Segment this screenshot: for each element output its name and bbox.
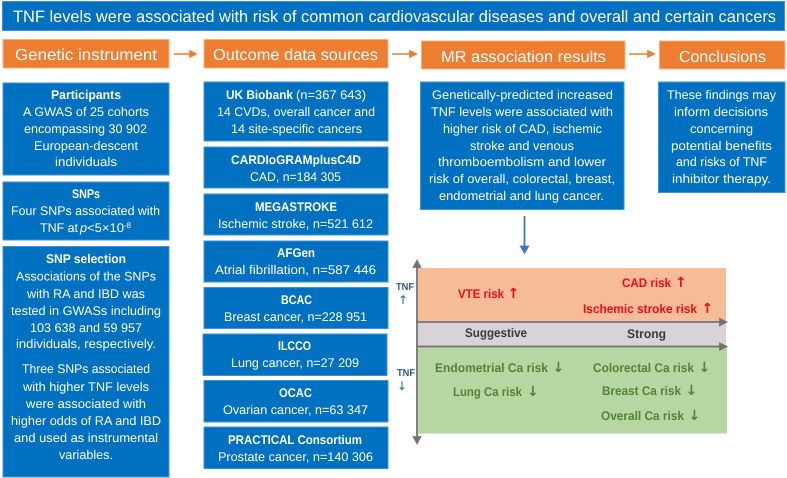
result: breast cancer risk: ↓ <box>686 383 697 399</box>
axis label: suggestive: Suggestive <box>465 326 527 340</box>
band: evidence strength axis <box>418 321 726 346</box>
label: TNF increased <box>396 282 414 307</box>
panel: OCAC: OCAC <box>279 386 312 400</box>
panel: conclusions text: inform decisions <box>674 105 768 119</box>
panel: CARDIoGRAMplusC4D: CAD, n=184 305 <box>250 170 341 184</box>
panel: CARDIoGRAMplusC4D <box>204 147 388 188</box>
label: TNF decreased: ↓ <box>397 379 407 393</box>
text: SNPs description: -8 <box>124 221 132 230</box>
text: SNPs description: TNF at <box>40 221 78 235</box>
panel: conclusions text: and risks of TNF <box>676 155 767 169</box>
text: participants description: encompassing 30 902 <box>24 122 147 136</box>
step header: MR association results: MR association results <box>441 49 606 66</box>
text: SNPs description: <5×10 <box>87 221 124 235</box>
chart: risk by TNF direction and evidence strength <box>396 261 727 443</box>
text: SNP association testing: with RA and IBD was <box>26 287 145 301</box>
text: SNPs description: Four SNPs associated with <box>11 204 160 218</box>
panel: OCAC <box>204 380 388 422</box>
result: colorectal cancer risk: ↓ <box>698 360 710 376</box>
text: UK Biobank outcomes <box>217 105 375 136</box>
label: TNF decreased: TNF <box>397 368 415 379</box>
result: lung cancer risk: Lung Ca risk <box>453 385 523 399</box>
text: instrumental variables: with higher TNF levels <box>22 380 149 394</box>
text: instrumental variables: variables. <box>59 448 113 462</box>
panel: MR association results text: thromboembolism and lower <box>438 155 606 169</box>
heading: SNP selection: SNP selection <box>46 252 126 266</box>
panel: MR association results text: risk of overall, colorectal, breast, <box>429 172 615 186</box>
label: TNF increased: TNF <box>396 282 414 293</box>
step header: conclusions: Conclusions <box>679 49 766 66</box>
heading: participants: Participants <box>51 88 121 102</box>
panel: MR association results text: Genetically-predicted increased <box>432 88 613 102</box>
axis: TNF direction <box>414 261 420 443</box>
panel: conclusions text <box>658 82 785 192</box>
text: UK Biobank outcomes: 14 CVDs, overall cancer and <box>217 105 375 119</box>
label: TNF increased: ↑ <box>398 293 408 307</box>
panel: PRACTICAL Consortium: PRACTICAL Consortium <box>228 433 362 447</box>
result: CAD risk: ↑ <box>675 275 687 291</box>
step header: outcome data sources: Outcome data sources <box>213 47 378 64</box>
heading: UK Biobank: (n=367 643) <box>296 88 366 102</box>
result: VTE risk: ↑ <box>508 286 519 302</box>
panel: BCAC: BCAC <box>281 293 312 307</box>
panel: SNP selection <box>3 246 169 477</box>
text: instrumental variables: Three SNPs associated <box>22 362 150 376</box>
panel: AFGen: Atrial fibrillation, n=587 446 <box>215 263 376 277</box>
step header: genetic instrument <box>3 40 169 68</box>
result: overall cancer risk: Overall Ca risk <box>601 409 685 423</box>
text: SNPs description: p <box>79 221 87 235</box>
band: higher TNF <box>418 268 726 321</box>
text: SNP association testing <box>11 270 161 351</box>
result: endometrial cancer risk: ↓ <box>552 360 564 376</box>
panel: ILCCO <box>203 334 387 376</box>
text: instrumental variables: and used as instrumental <box>14 431 158 445</box>
title <box>2 2 784 30</box>
text: SNP association testing: tested in GWASs including <box>11 304 161 318</box>
text: SNP association testing: individuals, respectively. <box>16 337 156 351</box>
text: UK Biobank outcomes: 14 site-specific cancers <box>231 122 362 136</box>
title: TNF levels were associated with risk of common cardiovascular diseases and overall and certain cancers <box>13 8 776 26</box>
result: ischemic stroke risk: Ischemic stroke risk <box>583 302 698 316</box>
result: lung cancer risk: ↓ <box>527 384 539 400</box>
panel: conclusions text: inhibitor therapy. <box>672 172 771 186</box>
panel: MR association results text: stroke and venous <box>470 139 574 153</box>
text: instrumental variables: were associated with <box>25 397 146 411</box>
panel: conclusions text: concerning <box>690 122 753 136</box>
panel: MR association results text <box>420 82 624 210</box>
panel: conclusions text: These findings may <box>667 88 777 102</box>
arrow: outcome data to MR results <box>392 51 416 57</box>
text: participants description: European-descent <box>34 139 139 153</box>
step header: outcome data sources <box>204 40 388 68</box>
panel: SNPs <box>3 182 169 240</box>
text: participants description: individuals <box>55 155 117 169</box>
axis label: strong: Strong <box>627 327 666 341</box>
step header: genetic instrument: Genetic instrument <box>15 47 158 64</box>
heading: SNPs: SNPs <box>72 187 100 201</box>
text: instrumental variables <box>11 362 161 462</box>
panel: BCAC: Breast cancer, n=228 951 <box>224 310 367 324</box>
result: breast cancer risk: Breast Ca risk <box>602 384 682 398</box>
panel: PRACTICAL Consortium: Prostate cancer, n=140 306 <box>218 450 373 464</box>
result: endometrial cancer risk: Endometrial Ca risk <box>435 361 549 375</box>
panel: MR association results text: higher risk of CAD, ischemic <box>443 122 602 136</box>
text: SNP association testing: Associations of the SNPs <box>16 270 156 284</box>
arrow: MR results to conclusions <box>629 51 654 57</box>
panel: conclusions text: potential benefits <box>671 139 772 153</box>
text: instrumental variables: higher odds of RA and IBD <box>11 414 161 428</box>
result: overall cancer risk: ↓ <box>688 408 700 424</box>
arrow: results to risk chart <box>521 216 528 252</box>
panel: CARDIoGRAMplusC4D: CARDIoGRAMplusC4D <box>231 153 361 167</box>
panel: MR association results text: TNF levels were associated with <box>431 105 613 119</box>
heading: UK Biobank: UK Biobank <box>226 88 294 102</box>
heading: UK Biobank <box>226 88 366 102</box>
axis: lower evidence strength <box>417 344 726 350</box>
panel: ILCCO: Lung cancer, n=27 209 <box>231 356 359 370</box>
step header: MR association results <box>422 41 625 69</box>
label: TNF decreased <box>397 368 415 393</box>
panel: BCAC <box>204 288 388 328</box>
text: participants description: A GWAS of 25 cohorts <box>23 105 149 119</box>
axis: upper evidence strength <box>417 319 726 325</box>
step header: conclusions <box>660 41 785 69</box>
panel: ILCCO: ILCCO <box>278 339 311 353</box>
panel: PRACTICAL Consortium <box>204 427 388 468</box>
text: SNP association testing: 103 638 and 59 957 <box>30 321 142 335</box>
panel: MEGASTROKE <box>204 194 388 235</box>
panel: MEGASTROKE: Ischemic stroke, n=521 612 <box>218 217 373 231</box>
result: VTE risk: VTE risk <box>458 287 505 301</box>
text: SNPs description <box>11 204 160 235</box>
panel: MR association results text: endometrial and lung cancer. <box>439 189 604 203</box>
result: colorectal cancer risk: Colorectal Ca risk <box>593 361 695 375</box>
band: lower TNF <box>418 346 727 434</box>
panel: UK Biobank <box>204 82 388 141</box>
text: participants description <box>23 105 149 169</box>
panel: MEGASTROKE: MEGASTROKE <box>255 200 337 214</box>
panel: AFGen <box>204 241 388 282</box>
result: CAD risk: CAD risk <box>622 276 672 290</box>
arrow: genetic instrument to outcome data <box>174 51 196 57</box>
panel: OCAC: Ovarian cancer, n=63 347 <box>223 403 368 417</box>
result: ischemic stroke risk: ↑ <box>702 301 713 317</box>
panel: AFGen: AFGen <box>277 246 315 260</box>
panel: participants <box>3 83 169 175</box>
